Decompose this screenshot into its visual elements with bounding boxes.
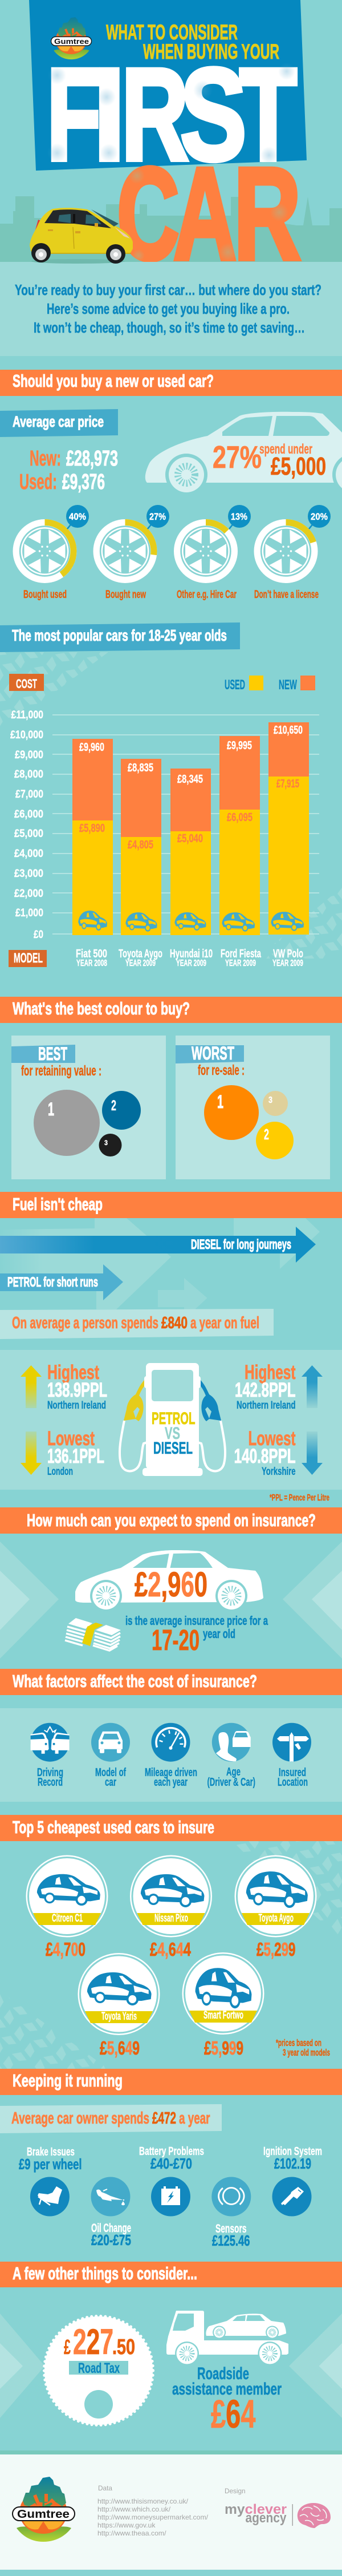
- bar: VW Polo: £7,915: [276, 778, 299, 790]
- car silhouette: 27% spend under 5000: 27%: [213, 439, 262, 475]
- title: what to consider: WHAT TO CONSIDER: [106, 21, 238, 44]
- icon: speedometer: [152, 1723, 190, 1762]
- background chevrons: insurance: [0, 1542, 342, 1659]
- car card: Nissan Pixo: Nissan Pixo: [154, 1912, 188, 1924]
- road tax disc: 227: [73, 2322, 113, 2362]
- item: brake issues: Brake Issues: [27, 2146, 75, 2158]
- wheel chart: bought new: Bought new: [105, 589, 146, 601]
- road tax disc: [44, 2316, 153, 2425]
- panel: petrol vs diesel: [0, 1350, 342, 1490]
- banner: new or used: [0, 370, 342, 396]
- title: FIRST: R: [121, 41, 189, 188]
- banner: other things: [0, 2262, 342, 2287]
- factor labels: Age: [226, 1766, 241, 1778]
- callout: annual spend: £472: [152, 2109, 176, 2128]
- label: average car price: [0, 409, 118, 437]
- icon: yellow car: [30, 208, 133, 264]
- bar: Fiat 500: £9,960: [79, 741, 104, 754]
- average prices: Used:: [19, 470, 57, 494]
- bar: Fiat 500: [72, 739, 113, 935]
- diesel column: Lowest: [249, 1427, 296, 1450]
- model labels: Toyota Aygo: [119, 948, 162, 960]
- road tax disc: Road Tax: [78, 2360, 120, 2376]
- item: ignition: £102.19: [274, 2155, 311, 2172]
- car card: Toyota Aygo: [235, 1855, 317, 1960]
- footer panel: [0, 2454, 342, 2570]
- y axis labels: £11,000: [11, 709, 43, 721]
- model labels: VW Polo: [273, 948, 303, 960]
- item: oil change: [91, 2177, 131, 2249]
- icon: signpost: [272, 1723, 311, 1762]
- y axis labels: £1,000: [15, 907, 43, 919]
- bar: VW Polo: £10,650: [274, 724, 303, 737]
- design credit: [225, 2487, 331, 2528]
- model labels: [76, 948, 303, 968]
- wheel chart: bought new: 27%: [149, 511, 166, 522]
- bar: VW Polo: [268, 722, 309, 935]
- car card: Toyota Aygo: £5,299: [256, 1939, 295, 1960]
- bar: Hyundai i10: [170, 769, 211, 935]
- panel: best colours: for retaining value :: [21, 1063, 101, 1079]
- design credit: clever: [245, 2502, 287, 2517]
- item: oil change: £20-£75: [91, 2231, 131, 2249]
- callout: fuel spend: On average a person spends: [12, 1314, 158, 1332]
- petrol column: Highest: [47, 1361, 99, 1384]
- bar: Toyota Aygo: £4,805: [128, 839, 153, 851]
- factor labels: Driving: [37, 1766, 63, 1779]
- design credit: agency: [245, 2510, 287, 2526]
- car silhouette: 27% spend under 5000: [145, 412, 342, 496]
- text: average insurance price: is the average insurance price for a: [125, 1613, 268, 1628]
- wheel chart: other: [174, 505, 251, 601]
- wheel chart: bought used: Bought used: [23, 589, 67, 601]
- average prices: [19, 447, 118, 494]
- car card: Toyota Yaris: £5,649: [100, 2037, 140, 2059]
- panel: worst colours: for re-sale :: [198, 1062, 245, 1078]
- banner: best colour: [0, 997, 342, 1023]
- y axis labels: £9,000: [15, 749, 43, 761]
- header: blue title panel: [29, 0, 307, 188]
- text: average insurance price: 17-20: [152, 1624, 199, 1656]
- data sources: Data: [98, 2484, 112, 2492]
- diesel column: Northern Ireland: [237, 1400, 295, 1412]
- model labels: YEAR 2009: [125, 959, 156, 968]
- y axis labels: £6,000: [14, 808, 43, 820]
- item: sensors: Sensors: [215, 2222, 246, 2235]
- icon: Gumtree logo: Gumtree: [54, 37, 89, 46]
- model labels: Ford Fiesta: [221, 948, 262, 960]
- car card: Citroen C1: Citroen C1: [52, 1912, 83, 1924]
- petrol column: London: [47, 1466, 73, 1478]
- y axis labels: £8,000: [14, 769, 43, 781]
- title: FIRST: S: [180, 41, 247, 188]
- icon: age driver and car: [212, 1723, 251, 1762]
- panel: best colours: 2: [111, 1098, 116, 1114]
- intro panel: [0, 262, 342, 356]
- icon: fuel pump: VS: [165, 1424, 180, 1443]
- legend: USED: [225, 677, 245, 693]
- y axis labels: £0: [34, 929, 43, 941]
- petrol column: 136.1PPL: [47, 1445, 104, 1467]
- car card: Smart Fortwo: [182, 1952, 264, 2059]
- panel: best colours: [11, 1036, 166, 1179]
- car card: Smart Fortwo: Smart Fortwo: [203, 2009, 243, 2021]
- wheel chart: bought new: [93, 505, 169, 601]
- title: FIRST: F: [47, 41, 101, 188]
- item: battery: [139, 2145, 204, 2216]
- car card: Citroen C1: £4,700: [46, 1939, 85, 1960]
- icon: brain: [298, 2503, 331, 2528]
- car card: Nissan Pixo: [130, 1855, 212, 1960]
- road tax disc: .50: [112, 2335, 135, 2359]
- banner: best colour: What's the best colour to buy?: [13, 998, 190, 1018]
- bar: Toyota Aygo: [121, 759, 161, 935]
- factor labels: Mileage driven: [145, 1766, 197, 1779]
- panel: best colours: BEST: [38, 1044, 67, 1064]
- item: battery: Battery Problems: [139, 2145, 204, 2158]
- bar: Ford Fiesta: [219, 736, 260, 935]
- panel: best colours: 1: [48, 1099, 54, 1119]
- diesel column: 142.8PPL: [235, 1379, 295, 1401]
- wheel chart: no license: 20%: [311, 511, 328, 522]
- wheel chart: bought used: [13, 505, 89, 601]
- data sources: http://www.moneysupermarket.com/: [97, 2513, 209, 2521]
- title: CAR: [117, 140, 301, 287]
- model labels: YEAR 2008: [76, 959, 107, 968]
- text: roadside assistance: [172, 2364, 282, 2436]
- banner: keeping it running: [0, 2069, 342, 2095]
- item: ignition: [263, 2145, 322, 2216]
- text: average insurance price: [125, 1613, 268, 1656]
- icon: Gumtree logo footer: Gumtree: [17, 2508, 70, 2521]
- panel: worst colours: 1: [217, 1091, 223, 1112]
- bar: Ford Fiesta: £9,995: [227, 739, 252, 752]
- average prices: £9,376: [62, 470, 105, 494]
- cost axis title: COST: [16, 677, 37, 691]
- label: most popular cars: [0, 622, 240, 652]
- panel: worst colours: 3: [268, 1095, 272, 1105]
- title: FIRST: T: [239, 41, 297, 188]
- diesel column: [234, 1361, 323, 1478]
- y axis labels: £5,000: [14, 828, 43, 840]
- callout: fuel spend: [0, 1309, 274, 1339]
- title: CAR: A: [173, 140, 237, 287]
- arrow: diesel: [0, 1227, 316, 1263]
- cost axis title: [9, 674, 44, 691]
- car card: Nissan Pixo: £4,644: [150, 1939, 191, 1960]
- banner: fuel: [0, 1192, 342, 1218]
- icon: Gumtree logo: [51, 17, 91, 59]
- callout: annual spend: Average car owner spends: [11, 2109, 149, 2128]
- legend: NEW: [279, 677, 297, 693]
- item: sensors: [211, 2177, 251, 2249]
- text: average insurance price: year old: [203, 1627, 235, 1641]
- label: most popular cars: The most popular cars for 18-25 year olds: [12, 626, 227, 644]
- road tax disc: £: [64, 2335, 71, 2359]
- label: average car price: Average car price: [13, 413, 104, 430]
- item: sensors: £125.46: [212, 2232, 250, 2249]
- title: FIRST: I: [93, 41, 125, 188]
- factor labels: (Driver & Car): [207, 1776, 255, 1789]
- car silhouette: 27% spend under 5000: spend under: [259, 442, 312, 457]
- panel: factors: [0, 1708, 342, 1802]
- factor labels: Insured: [279, 1766, 306, 1779]
- car card: Citroen C1: [26, 1855, 108, 1960]
- callout: annual spend: [0, 2104, 222, 2133]
- factor labels: each year: [154, 1776, 188, 1789]
- item: battery: £40-£70: [150, 2155, 192, 2172]
- wheel chart: other: Other e.g. Hire Car: [177, 589, 237, 601]
- model labels: Hyundai i10: [170, 948, 213, 960]
- icon: fuel pump: PETROL: [152, 1409, 195, 1428]
- model labels: YEAR 2009: [225, 959, 256, 968]
- text: roadside assistance: assistance member: [172, 2380, 282, 2399]
- arrow: petrol: [0, 1264, 123, 1300]
- banner: top 5: [0, 1815, 342, 1841]
- item: oil change: Oil Change: [91, 2222, 131, 2235]
- data sources: http://www.theaa.com/: [97, 2529, 166, 2537]
- banner: new or used: Should you buy a new or used car?: [13, 371, 214, 391]
- design credit: Design: [225, 2487, 245, 2495]
- icon: banknotes: [65, 1618, 121, 1651]
- callout: fuel spend: a year on fuel: [190, 1314, 259, 1332]
- diesel column: 140.8PPL: [234, 1445, 296, 1467]
- design credit: my: [225, 2502, 245, 2517]
- wheel chart: no license: [254, 505, 331, 601]
- icon: recovery truck: [166, 2311, 288, 2365]
- data sources: https://www.gov.uk: [97, 2521, 156, 2529]
- car card: Toyota Aygo: Toyota Aygo: [259, 1912, 294, 1924]
- petrol column: [21, 1361, 107, 1478]
- car card: Smart Fortwo: £5,999: [204, 2037, 243, 2059]
- y axis labels: £7,000: [15, 788, 43, 800]
- model labels: YEAR 2009: [272, 959, 303, 968]
- bar: Fiat 500: £5,890: [79, 822, 105, 835]
- y axis labels: £3,000: [14, 868, 43, 880]
- average prices: New:: [30, 447, 61, 471]
- diesel column: Highest: [245, 1361, 296, 1384]
- factor labels: car: [105, 1776, 116, 1789]
- factor labels: Record: [38, 1776, 63, 1789]
- car card: Toyota Yaris: [78, 1953, 160, 2059]
- panel: worst colours: WORST: [192, 1043, 234, 1063]
- callout: fuel spend: £840: [161, 1314, 188, 1332]
- header: skyline band: [0, 196, 342, 262]
- model labels: Fiat 500: [76, 948, 107, 960]
- icon: Gumtree logo footer: [13, 2477, 75, 2542]
- icon: driving record: [31, 1723, 70, 1762]
- title: FIRST: [47, 41, 297, 188]
- model axis title: MODEL: [14, 951, 43, 966]
- icon: fuel pump: [120, 1363, 225, 1476]
- icon: model of car: [91, 1723, 130, 1762]
- y axis labels: £10,000: [10, 729, 43, 741]
- data sources: http://www.thisismoney.co.uk/: [97, 2497, 189, 2505]
- bar: Hyundai i10: £8,345: [177, 773, 203, 786]
- panel: best colours: 3: [104, 1139, 108, 1147]
- car silhouette: insurance price: £2,960: [135, 1565, 207, 1604]
- y axis labels: £2,000: [14, 888, 43, 900]
- bar: Hyundai i10: £5,040: [177, 832, 203, 845]
- car silhouette: insurance price: [75, 1550, 263, 1612]
- factor labels: [37, 1766, 308, 1789]
- footnote: prices based on: [276, 2037, 330, 2058]
- arrow: petrol: PETROL for short runs: [7, 1275, 98, 1290]
- background chevrons: other things: [0, 2314, 342, 2418]
- factor labels: Location: [278, 1776, 308, 1789]
- petrol column: Lowest: [47, 1427, 95, 1450]
- legend: [225, 676, 315, 693]
- bar: Toyota Aygo: £8,835: [128, 762, 153, 774]
- wheel chart: bought used: 40%: [69, 511, 86, 522]
- wheel chart: other: 13%: [231, 511, 247, 522]
- model axis title: [9, 950, 47, 967]
- banner: other things: A few other things to consider...: [13, 2263, 197, 2283]
- diesel column: Yorkshire: [262, 1466, 295, 1478]
- factor labels: Model of: [95, 1766, 126, 1779]
- banner: fuel: Fuel isn't cheap: [13, 1194, 103, 1214]
- petrol column: 138.9PPL: [47, 1379, 107, 1401]
- item: brake issues: £9 per wheel: [19, 2156, 82, 2173]
- average prices: £28,973: [66, 447, 118, 471]
- petrol column: Northern Ireland: [47, 1400, 106, 1412]
- callout: annual spend: a year: [179, 2109, 210, 2128]
- data sources: http://www.which.co.uk/: [97, 2505, 171, 2513]
- y axis labels: £4,000: [14, 848, 43, 860]
- item: brake issues: [19, 2146, 82, 2216]
- car card: Toyota Yaris: Toyota Yaris: [101, 2011, 137, 2023]
- title: CAR: R: [234, 140, 301, 287]
- title: CAR: C: [117, 140, 180, 287]
- data sources: [97, 2484, 209, 2537]
- text: roadside assistance: Roadside: [197, 2364, 249, 2383]
- bar: Ford Fiesta: £6,095: [227, 811, 253, 824]
- banner: top 5: Top 5 cheapest used cars to insure: [13, 1817, 214, 1837]
- text: roadside assistance: £64: [211, 2392, 256, 2436]
- bar chart: popular cars: [9, 674, 319, 968]
- panel: worst colours: 2: [264, 1126, 269, 1143]
- background arrows: fuel: [0, 1218, 320, 1309]
- model labels: YEAR 2009: [176, 959, 206, 968]
- banner: keeping it running: Keeping it running: [13, 2070, 123, 2090]
- y axis labels: [10, 709, 43, 941]
- panel: worst colours: [176, 1036, 330, 1179]
- icon: fuel pump: DIESEL: [153, 1439, 193, 1458]
